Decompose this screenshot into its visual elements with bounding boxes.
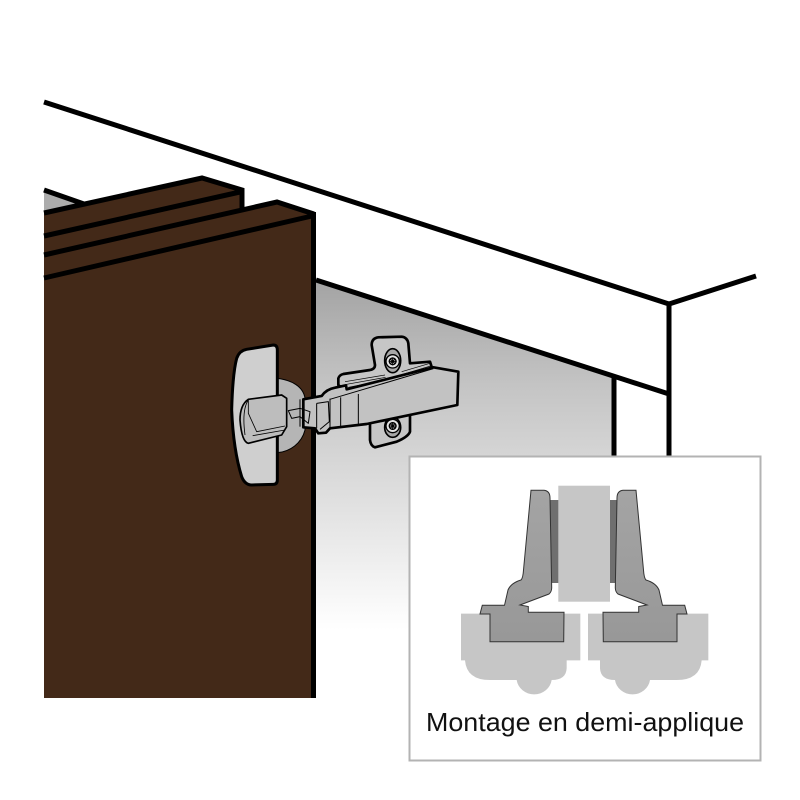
caption: Montage en demi-applique [426, 707, 744, 737]
dark door strips [550, 500, 618, 583]
hinge arm divisions [288, 369, 433, 429]
cabinet interior shaded wall [44, 190, 614, 700]
screw top [385, 349, 401, 373]
mounting plate ridges [345, 363, 431, 387]
mounting plate upper wing [338, 337, 433, 392]
right hinge cross-section [603, 490, 687, 642]
right cabinet side [588, 614, 708, 694]
hinge cup boss [277, 378, 305, 453]
panel: inset mounting diagram [410, 456, 760, 760]
cabinet frame lines [44, 102, 756, 458]
hinge arm body [303, 367, 458, 433]
hinge cup plate [232, 345, 277, 485]
hinge cup insert [240, 395, 287, 443]
door: brown panel with stacked edges [44, 178, 316, 698]
icon: concealed hinge [232, 337, 458, 485]
door cross-section [558, 486, 610, 602]
left hinge cross-section [480, 490, 564, 642]
mounting plate lower ear [370, 413, 410, 447]
left cabinet side [461, 614, 580, 694]
screw bottom [385, 417, 401, 437]
